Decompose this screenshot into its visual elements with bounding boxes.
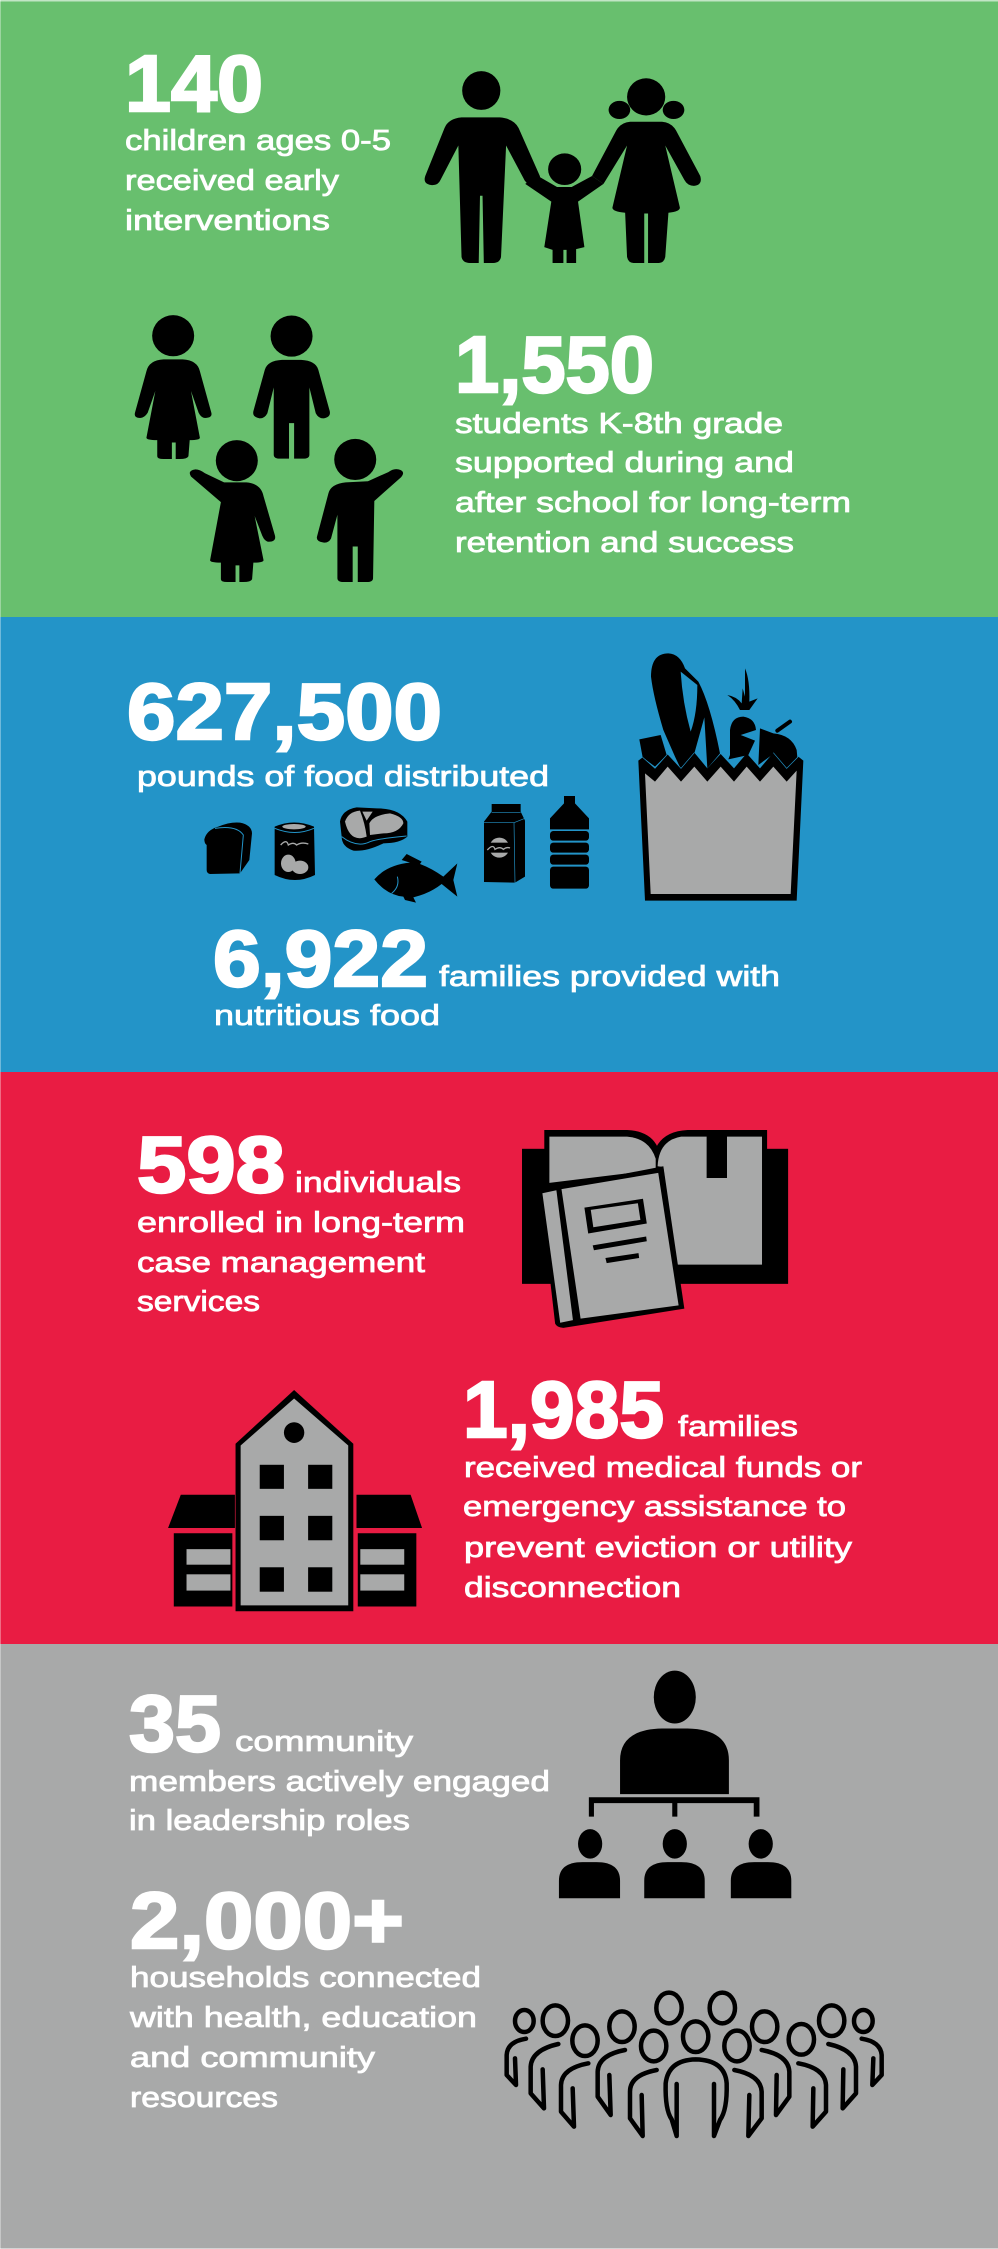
icons: food items: [204, 796, 589, 903]
stat: 6,922 families: [213, 914, 780, 1032]
stat: 598 individuals: 598: [137, 1120, 285, 1209]
stat: 1,550 students: students K-8th grade: [455, 408, 783, 440]
stat: 1,550 students: after school for long-term: [455, 487, 851, 519]
stat: 2,000+ households: 2,000+: [130, 1876, 404, 1965]
stat: 140 children: received early: [125, 165, 340, 197]
stat: 35 community members: in leadership roles: [129, 1805, 410, 1837]
stat: 1,550 students: [455, 320, 851, 559]
stat: 6,922 families: 6,922: [213, 914, 428, 1003]
icon: can: [275, 822, 315, 880]
stat: 1,985 families: [463, 1365, 862, 1604]
stat: 1,985 families: 1,985: [463, 1365, 664, 1454]
stat: 2,000+ households: with health, education: [129, 2002, 477, 2034]
icon: fish: [374, 854, 457, 903]
stat: 35 community members: community: [235, 1726, 414, 1758]
stat: 627,500 pounds: pounds of food distributed: [137, 761, 549, 793]
stat: 2,000+ households: resources: [130, 2082, 278, 2114]
icon: open book and notebook: [522, 1130, 788, 1328]
panel: red assistance section: [0, 1072, 998, 1644]
stat: 627,500 pounds: 627,500: [127, 667, 442, 756]
stat: 598 individuals: enrolled in long-term: [137, 1207, 465, 1239]
icon: bread: [204, 822, 252, 874]
icon: leader and team hierarchy: [559, 1671, 791, 1898]
icon: four children: [135, 315, 403, 582]
stat: 1,550 students: retention and success: [455, 527, 794, 559]
panel: green children section: [0, 0, 998, 617]
stat: 627,500 pounds: [127, 667, 549, 793]
stat: 6,922 families: families provided with: [439, 961, 780, 993]
stat: 2,000+ households: and community: [130, 2042, 376, 2074]
icon: steak: [340, 807, 407, 851]
stat: 598 individuals: case management: [137, 1247, 425, 1279]
stat: 1,550 students: 1,550: [455, 320, 654, 409]
stat: 1,550 students: supported during and: [455, 447, 794, 479]
stat: 1,985 families: received medical funds or: [464, 1452, 862, 1484]
stat: 2,000+ households: households connected: [130, 1962, 481, 1994]
stat: 2,000+ households: [129, 1876, 481, 2114]
stat: 598 individuals: [137, 1120, 465, 1318]
icon: apartment building: [168, 1390, 422, 1611]
stat: 140 children: children ages 0-5: [125, 125, 391, 157]
stat: 1,985 families: disconnection: [464, 1572, 681, 1604]
panel: blue food section: [0, 617, 998, 1072]
icon: crowd of people outlines: [507, 1993, 882, 2136]
stat: 1,985 families: prevent eviction or utility: [464, 1532, 853, 1564]
panel: grey community section: [0, 1644, 998, 2249]
stat: 35 community members: members actively engaged: [129, 1766, 550, 1798]
icon: milk carton: [484, 804, 525, 883]
stat: 6,922 families: nutritious food: [214, 1000, 440, 1032]
stat: 140 children: 140: [125, 39, 263, 128]
stat: 1,985 families: families: [678, 1411, 798, 1443]
stat: 1,985 families: emergency assistance to: [463, 1491, 846, 1523]
stat: 35 community members: 35: [129, 1679, 221, 1768]
stat: 35 community members: [129, 1679, 550, 1837]
icon: family holding hands: [425, 71, 701, 263]
stat: 598 individuals: individuals: [295, 1167, 461, 1199]
icon: water bottle: [550, 796, 589, 889]
stat: 598 individuals: services: [137, 1286, 260, 1318]
stat: 140 children: [125, 39, 391, 237]
stat: 140 children: interventions: [125, 205, 330, 237]
icon: grocery bag: [638, 653, 803, 901]
